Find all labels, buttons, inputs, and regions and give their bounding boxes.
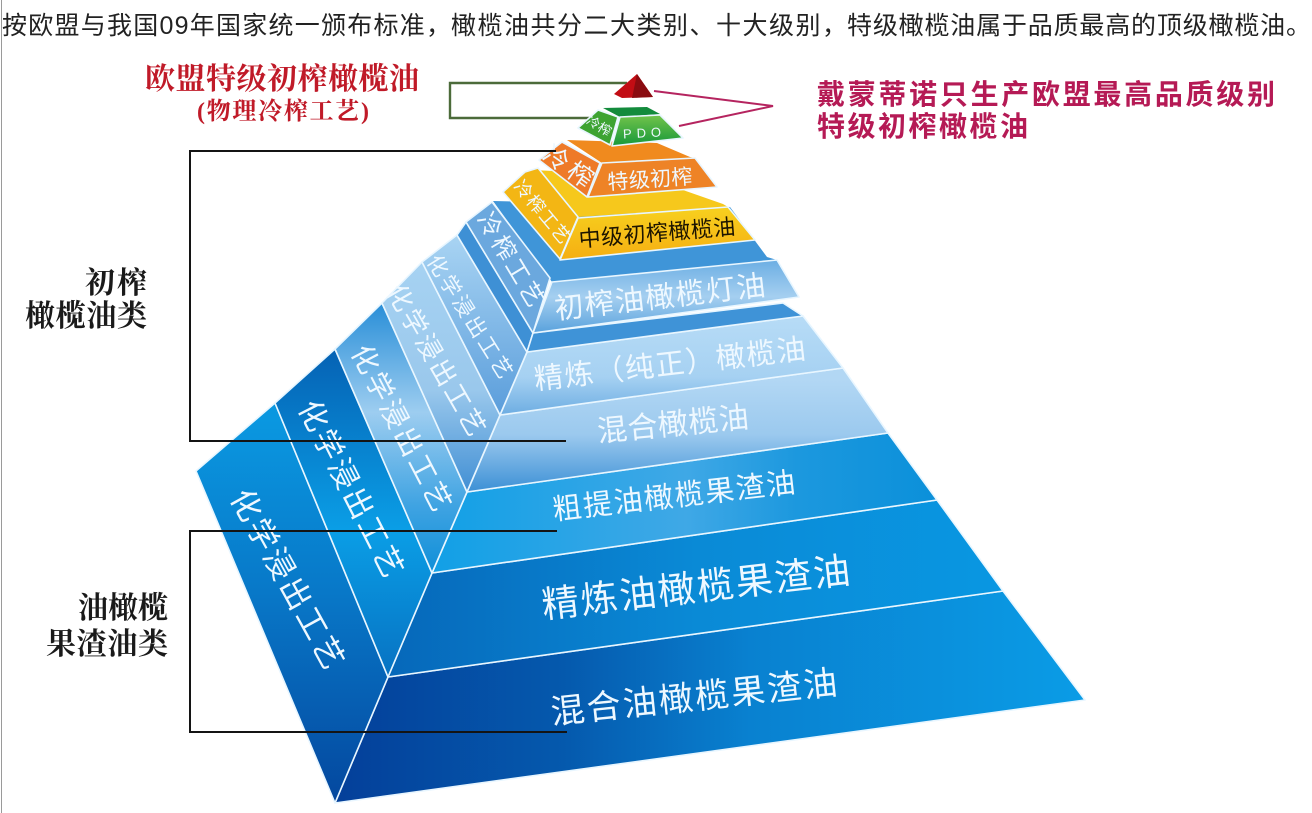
tier: PDO <box>578 107 683 146</box>
title: 特级橄榄油属于品质最高的顶级橄榄油。 <box>847 12 1311 40</box>
page left border <box>0 0 2 813</box>
tier: 精炼(纯正)橄榄油: 化学浸出工艺 <box>422 251 516 383</box>
tier: 混合油橄榄果渣油 <box>196 403 1085 803</box>
tier: 精炼油橄榄果渣油: 精炼油橄榄果渣油 <box>540 550 852 626</box>
callout: 欧盟特级初榨橄榄油 <box>145 62 419 125</box>
pyramid <box>196 74 1085 803</box>
tier: 特级初榨: 冷榨 <box>538 140 598 194</box>
callout: 戴蒙蒂诺 <box>817 79 1275 142</box>
bracket: top tier callout connector <box>450 83 627 118</box>
tier: 混合橄榄油: 混合橄榄油 <box>596 401 750 449</box>
label: 初榨橄榄油类: 初榨 <box>85 267 147 300</box>
label: 初榨橄榄油类 <box>25 267 147 333</box>
tier: PDO: PDO <box>623 125 661 141</box>
callout: 戴蒙蒂诺: 戴蒙蒂诺只生产欧盟最高品质级别 <box>817 79 1275 110</box>
title: 橄榄油共分二大类别、十大级别， <box>451 12 847 40</box>
label: 初榨橄榄油类: 橄榄油类 <box>25 299 147 333</box>
tier: 精炼(纯正)橄榄油 <box>422 222 843 415</box>
title <box>2 12 1311 40</box>
label: 油橄榄果渣油类: 果渣油类 <box>46 628 168 661</box>
callout: 欧盟特级初榨橄榄油: (物理冷榨工艺) <box>197 97 369 125</box>
title: 按欧盟与我国09年国家统一颁布标准， <box>2 12 451 40</box>
tier: 特级初榨 <box>538 140 717 197</box>
tier: 初榨油橄榄灯油: 初榨油橄榄灯油 <box>553 269 767 326</box>
tier: 粗提油橄榄果渣油 <box>335 303 937 573</box>
label: 油橄榄果渣油类 <box>46 591 168 661</box>
tier: 粗提油橄榄果渣油: 粗提油橄榄果渣油 <box>551 466 797 527</box>
tier: 粗提油橄榄果渣油: 化学浸出工艺 <box>345 340 457 516</box>
tier: red apex <box>614 74 653 98</box>
tier: 精炼油橄榄果渣油: 化学浸出工艺 <box>291 395 409 583</box>
tier: 初榨油橄榄灯油 <box>466 201 799 333</box>
tier: PDO: 冷榨 <box>584 113 614 139</box>
tier: 混合橄榄油: 化学浸出工艺 <box>381 279 491 441</box>
bracket: 油橄榄果渣油类 <box>190 531 567 732</box>
tier: 混合橄榄油 <box>381 262 888 492</box>
tier: 中级初榨橄榄油: 冷榨工艺 <box>510 176 574 248</box>
callout: 欧盟特级初榨橄榄油: 欧盟特级初榨橄榄油 <box>145 62 419 96</box>
bracket: 初榨橄榄油类 <box>190 151 566 441</box>
callout lines: magenta pointer <box>654 91 773 126</box>
tier: 混合油橄榄果渣油: 混合油橄榄果渣油 <box>549 664 839 732</box>
tier: 中级初榨橄榄油: 中级初榨橄榄油 <box>578 214 736 252</box>
tier: 初榨油橄榄灯油: 冷榨工艺 <box>471 208 549 312</box>
tier: 精炼油橄榄果渣油 <box>275 349 1003 677</box>
tier: 特级初榨: 特级初榨 <box>607 166 693 194</box>
tier: 精炼(纯正)橄榄油: 精炼（纯正）橄榄油 <box>532 333 807 396</box>
callout: 戴蒙蒂诺: 特级初榨橄榄油 <box>817 111 1028 142</box>
tier: 中级初榨橄榄油 <box>503 168 755 260</box>
label: 油橄榄果渣油类: 油橄榄 <box>78 591 168 625</box>
tier: 混合油橄榄果渣油: 化学浸出工艺 <box>223 483 351 675</box>
